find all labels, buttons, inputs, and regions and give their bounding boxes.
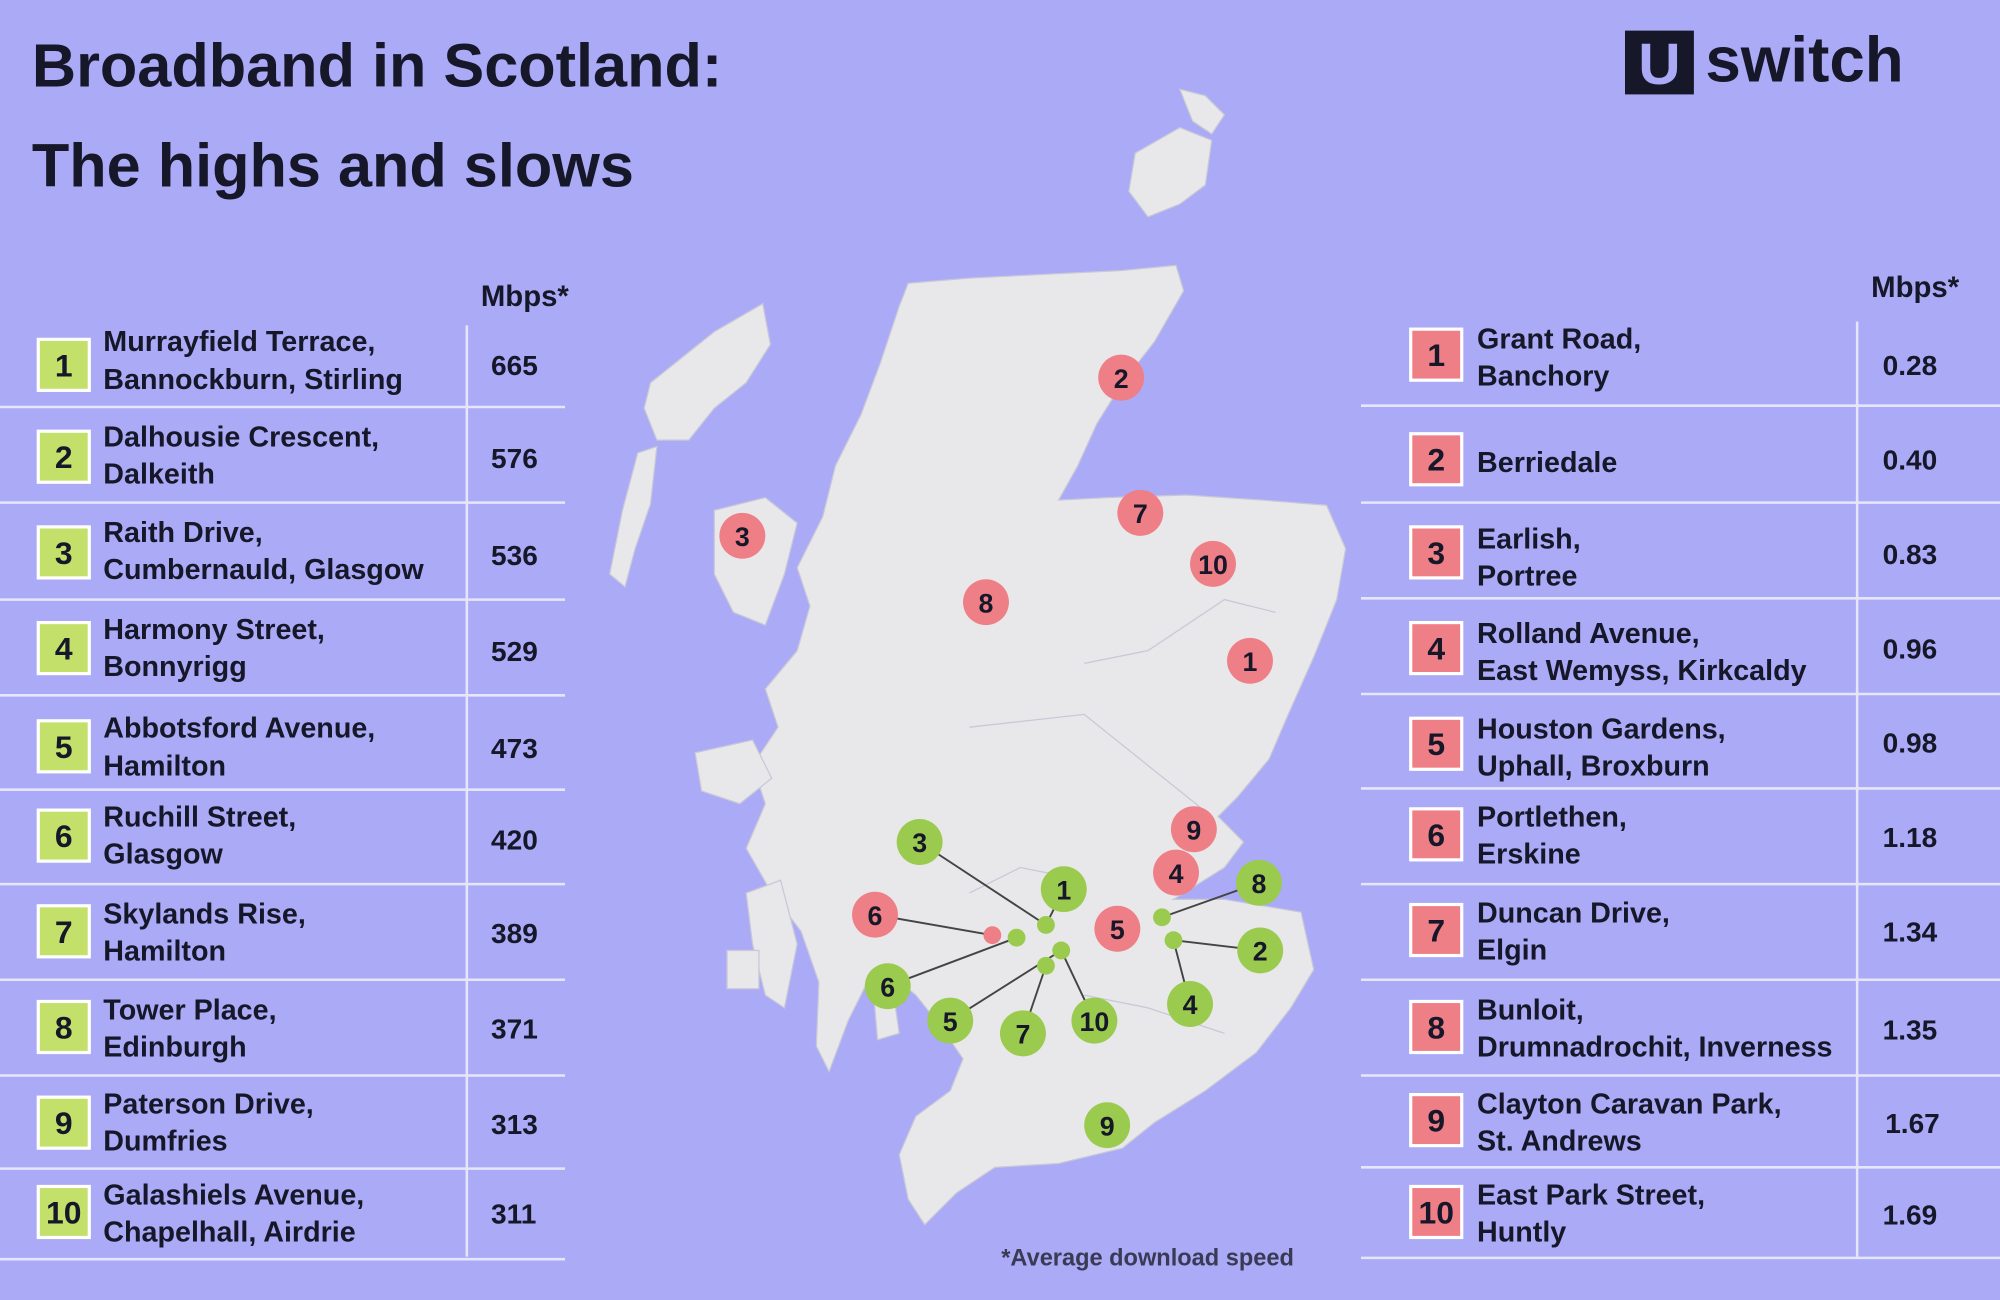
- panel: fastest table: 473: [491, 733, 538, 764]
- red markers (slowest): 9: [1186, 815, 1201, 845]
- map of Scotland: [610, 89, 1346, 1225]
- panel: slowest table: Berriedale: [1477, 447, 1617, 479]
- connector lines: [875, 842, 1260, 1033]
- panel: slowest table: Rolland Avenue,: [1477, 618, 1700, 650]
- panel: slowest table: Houston Gardens,: [1477, 714, 1726, 746]
- panel: fastest table: Chapelhall, Airdrie: [103, 1216, 356, 1248]
- panel: fastest table: 1: [55, 347, 73, 383]
- panel: slowest table: Clayton Caravan Park,: [1477, 1089, 1782, 1121]
- logo: uswitch: switch: [1705, 24, 1904, 96]
- green markers (fastest): 7: [1016, 1020, 1030, 1050]
- panel: fastest table: 665: [491, 350, 538, 381]
- panel: slowest table: 1.67: [1885, 1108, 1940, 1139]
- green markers (fastest): 8: [1251, 869, 1266, 899]
- red markers (slowest): 3: [735, 522, 750, 552]
- panel: fastest table: Hamilton: [103, 936, 226, 968]
- title: [32, 32, 722, 199]
- panel: fastest table: 8: [55, 1009, 73, 1045]
- panel: slowest table: 0.83: [1883, 539, 1937, 570]
- panel: fastest table: 529: [491, 636, 538, 667]
- panel: fastest table: 576: [491, 443, 538, 474]
- red markers (slowest): [719, 355, 1273, 952]
- red markers (slowest): 2: [1114, 364, 1129, 394]
- panel: slowest table: 3: [1427, 535, 1445, 571]
- red markers (slowest): 6: [868, 901, 882, 931]
- panel: slowest table: 1.18: [1883, 822, 1937, 853]
- red markers (slowest): 4: [1169, 859, 1184, 889]
- panel: slowest table: 7: [1427, 913, 1445, 949]
- panel: fastest table: 420: [491, 825, 538, 856]
- panel: slowest table: 9: [1427, 1103, 1445, 1139]
- panel: slowest table: 1.35: [1883, 1015, 1937, 1046]
- panel: fastest table: Dalkeith: [103, 459, 215, 491]
- panel: fastest table: Bonnyrigg: [103, 651, 247, 683]
- panel: fastest table: 371: [491, 1013, 538, 1044]
- panel: fastest table: Mbps*: [481, 280, 569, 313]
- panel: slowest table: Erskine: [1477, 839, 1581, 871]
- panel: slowest table: Duncan Drive,: [1477, 897, 1670, 929]
- panel: fastest table: Harmony Street,: [103, 614, 325, 646]
- panel: fastest table: Murrayfield Terrace,: [103, 326, 375, 358]
- green markers (fastest): 1: [1056, 875, 1071, 905]
- panel: slowest table: 5: [1427, 726, 1445, 762]
- panel: slowest table: 0.40: [1883, 444, 1937, 475]
- panel: slowest table: 0.98: [1883, 728, 1937, 759]
- panel: fastest table: Ruchill Street,: [103, 802, 296, 834]
- panel: slowest table: Banchory: [1477, 360, 1609, 392]
- panel: slowest table: East Park Street,: [1477, 1179, 1705, 1211]
- green markers (fastest): 10: [1079, 1007, 1109, 1037]
- panel: fastest table: Tower Place,: [103, 994, 277, 1026]
- green markers (fastest): 2: [1253, 937, 1268, 967]
- red markers (slowest): 7: [1133, 499, 1148, 529]
- panel: fastest table: 389: [491, 918, 538, 949]
- region boundaries (faint): [969, 600, 1276, 1033]
- panel: fastest table: Bannockburn, Stirling: [103, 364, 403, 396]
- panel: fastest table: 536: [491, 540, 538, 571]
- panel: slowest table: 1.69: [1883, 1200, 1937, 1231]
- small location dots: [983, 908, 1182, 975]
- panel: slowest table: 0.96: [1883, 633, 1937, 664]
- footnote: *Average download speed: [1001, 1245, 1294, 1271]
- logo: uswitch: U: [1638, 32, 1681, 97]
- panel: fastest table: Raith Drive,: [103, 517, 263, 549]
- logo: uswitch: [1625, 24, 1904, 97]
- panel: slowest table: Mbps*: [1871, 271, 1960, 304]
- panel: slowest table: 4: [1427, 631, 1445, 667]
- red markers (slowest): 5: [1110, 915, 1125, 945]
- panel: fastest table: 5: [55, 729, 73, 765]
- green markers (fastest): [865, 819, 1283, 1148]
- green markers (fastest): 5: [943, 1007, 958, 1037]
- panel: fastest table: 311: [491, 1198, 536, 1229]
- green markers (fastest): 4: [1183, 990, 1198, 1020]
- panel: fastest table: Glasgow: [103, 839, 224, 871]
- panel: fastest table: 3: [55, 535, 73, 571]
- panel: fastest table: [0, 280, 569, 1259]
- panel: fastest table: Dumfries: [103, 1126, 228, 1158]
- panel: slowest table: Drumnadrochit, Inverness: [1477, 1031, 1833, 1063]
- panel: fastest table: Paterson Drive,: [103, 1089, 314, 1121]
- panel: fastest table: 9: [55, 1105, 73, 1141]
- panel: fastest table: Cumbernauld, Glasgow: [103, 554, 424, 586]
- panel: fastest table: 6: [55, 818, 73, 854]
- green markers (fastest): 9: [1100, 1111, 1115, 1141]
- green markers (fastest): 6: [880, 972, 895, 1002]
- red markers (slowest): 10: [1198, 550, 1228, 580]
- title: Broadband in Scotland:: [32, 32, 722, 100]
- panel: slowest table: East Wemyss, Kirkcaldy: [1477, 655, 1807, 687]
- panel: fastest table: 7: [55, 914, 73, 950]
- panel: slowest table: 10: [1418, 1194, 1454, 1230]
- panel: slowest table: Earlish,: [1477, 524, 1581, 556]
- panel: slowest table: Bunloit,: [1477, 994, 1584, 1026]
- panel: slowest table: Grant Road,: [1477, 323, 1641, 355]
- panel: fastest table: 4: [55, 631, 73, 667]
- panel: slowest table: 6: [1427, 817, 1445, 853]
- panel: slowest table: St. Andrews: [1477, 1126, 1642, 1158]
- panel: slowest table: [1361, 271, 2000, 1258]
- panel: fastest table: Skylands Rise,: [103, 899, 306, 931]
- panel: slowest table: 1.34: [1883, 917, 1938, 948]
- panel: slowest table: Uphall, Broxburn: [1477, 751, 1710, 783]
- panel: slowest table: Huntly: [1477, 1216, 1566, 1248]
- panel: fastest table: Dalhousie Crescent,: [103, 422, 379, 454]
- panel: slowest table: 1: [1427, 337, 1445, 373]
- panel: fastest table: Abbotsford Avenue,: [103, 712, 375, 744]
- green markers (fastest): 3: [912, 828, 927, 858]
- red markers (slowest): 8: [979, 588, 994, 618]
- panel: slowest table: 2: [1427, 442, 1445, 478]
- panel: slowest table: Elgin: [1477, 934, 1547, 966]
- red markers (slowest): 1: [1243, 647, 1258, 677]
- panel: slowest table: Portlethen,: [1477, 802, 1627, 834]
- panel: slowest table: 8: [1427, 1009, 1445, 1045]
- panel: fastest table: 313: [491, 1109, 538, 1140]
- panel: fastest table: 2: [55, 439, 73, 475]
- panel: fastest table: Edinburgh: [103, 1031, 247, 1063]
- panel: fastest table: 10: [46, 1194, 82, 1230]
- panel: fastest table: Galashiels Avenue,: [103, 1179, 364, 1211]
- panel: fastest table: Hamilton: [103, 751, 226, 783]
- panel: slowest table: Portree: [1477, 561, 1577, 593]
- title: The highs and slows: [32, 131, 634, 199]
- panel: slowest table: 0.28: [1883, 350, 1937, 381]
